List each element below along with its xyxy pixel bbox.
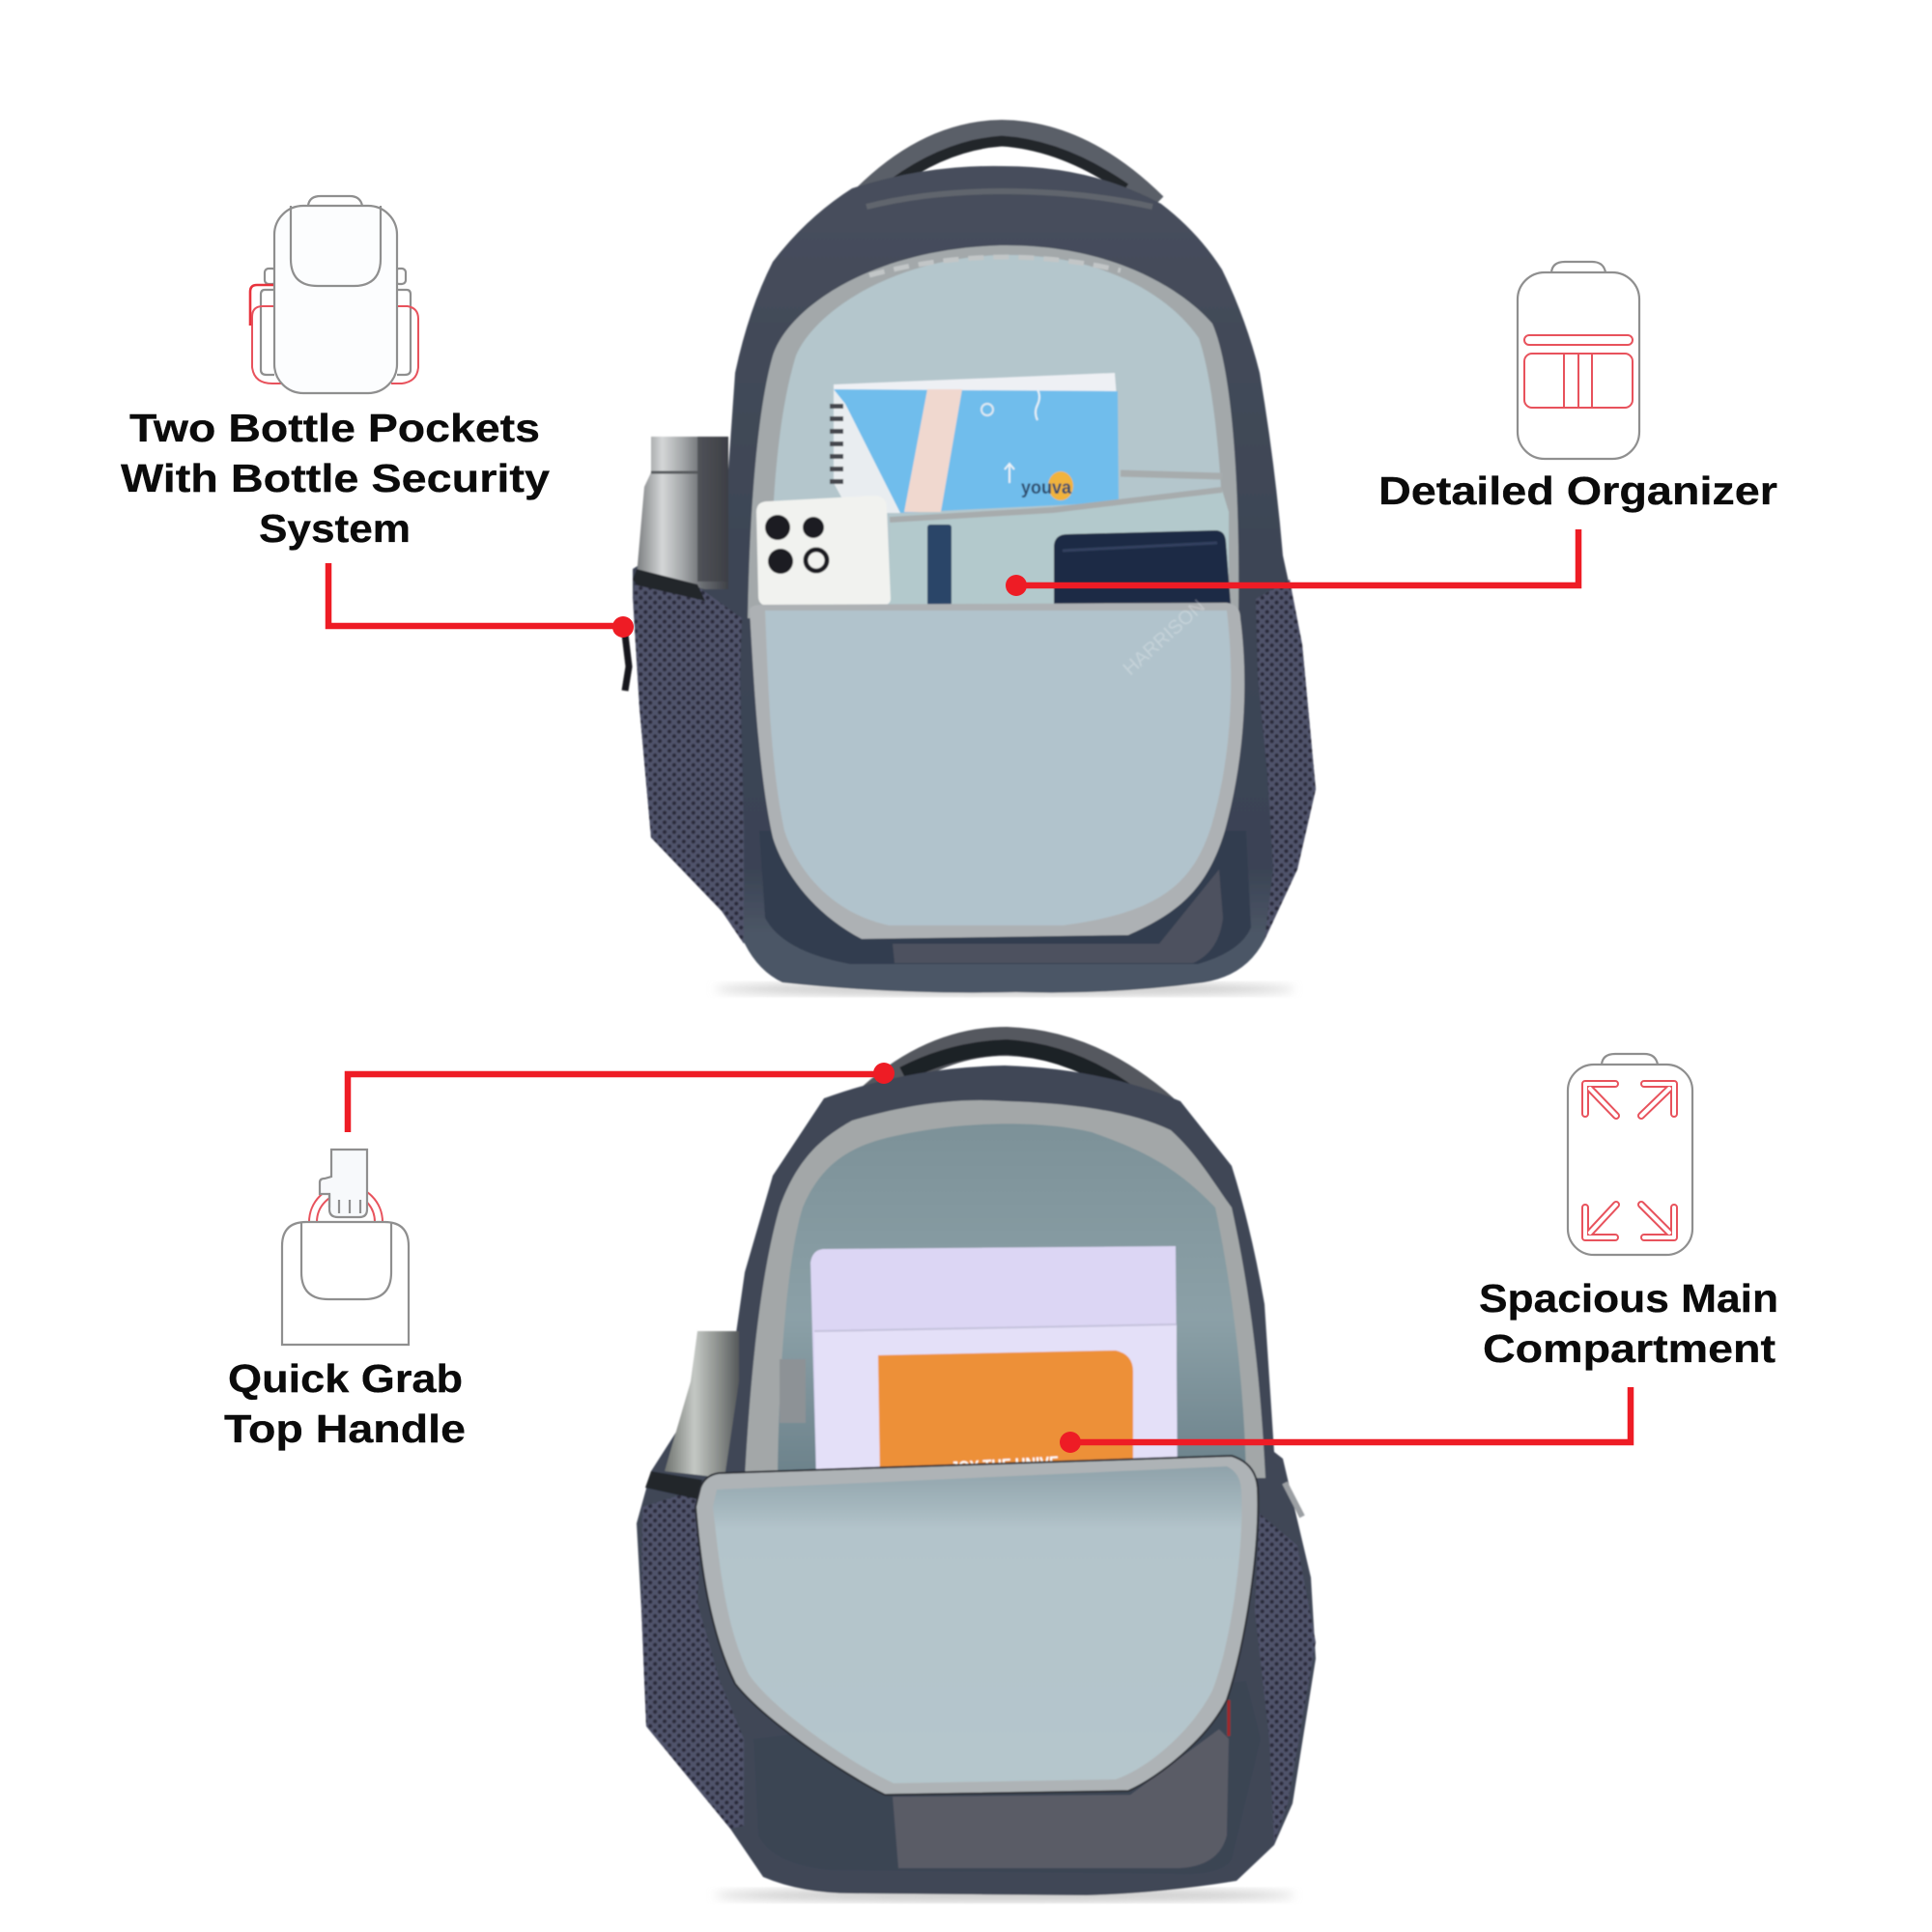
icon: backpack with bottle pockets <box>250 196 418 393</box>
backpack body <box>633 166 1316 993</box>
label text: Detailed Organizer <box>1378 469 1777 513</box>
label text: Two Bottle Pockets <box>129 406 540 450</box>
right mesh pocket <box>1255 1514 1316 1842</box>
callout: quick grab top handle <box>224 1063 895 1451</box>
label text: With Bottle Security <box>121 456 550 500</box>
interior lining <box>745 1100 1265 1478</box>
fabric tag <box>780 1359 806 1423</box>
youva logo: youva <box>1021 478 1071 498</box>
label text: Quick Grab <box>228 1356 463 1401</box>
front flap <box>696 1456 1258 1795</box>
zipper pull right <box>1285 1483 1302 1517</box>
left mesh bottle pocket <box>633 569 744 944</box>
wallet <box>1054 530 1231 611</box>
icon: organizer backpack <box>1518 262 1639 459</box>
backpack body <box>637 1065 1316 1895</box>
right mesh pocket <box>1256 580 1316 940</box>
top handle <box>860 1041 1164 1109</box>
icon: hand on handle <box>282 1150 409 1345</box>
lower front panel <box>759 831 1251 964</box>
left mesh bottle pocket <box>641 1471 744 1829</box>
interior lining <box>748 245 1238 618</box>
leader line with dot <box>1006 529 1578 596</box>
icon: expanding compartment <box>1568 1054 1692 1255</box>
lavender book <box>810 1246 1178 1478</box>
water bottle <box>637 437 728 589</box>
leader line with dot <box>1060 1387 1631 1453</box>
leader line with dot <box>328 563 634 638</box>
callout: two bottle pockets <box>121 196 634 638</box>
front flap <box>750 596 1244 939</box>
leader line with dot <box>348 1063 895 1132</box>
youva logo <box>1021 471 1073 500</box>
backpack photo: organizer view <box>623 131 1316 996</box>
front flap: HARRISON <box>1120 596 1209 680</box>
blue notebook <box>834 373 1119 513</box>
water bottle <box>665 1331 739 1478</box>
callout: spacious main compartment <box>1060 1054 1778 1453</box>
label text: Top Handle <box>224 1406 466 1451</box>
lower front panel <box>753 1681 1261 1874</box>
top handle <box>862 131 1155 205</box>
organizer pocket <box>890 473 1229 618</box>
callout: detailed organizer <box>1006 262 1777 596</box>
pen <box>927 525 952 606</box>
label text: System <box>259 506 411 551</box>
orange notebook <box>878 1350 1133 1478</box>
label text: Compartment <box>1483 1326 1776 1371</box>
zipper pull left <box>623 618 629 691</box>
phone <box>756 496 891 606</box>
backpack photo: main compartment view <box>637 1041 1316 1902</box>
label text: Spacious Main <box>1479 1276 1778 1321</box>
orange notebook: JOY THE UNIVE <box>951 1453 1059 1477</box>
